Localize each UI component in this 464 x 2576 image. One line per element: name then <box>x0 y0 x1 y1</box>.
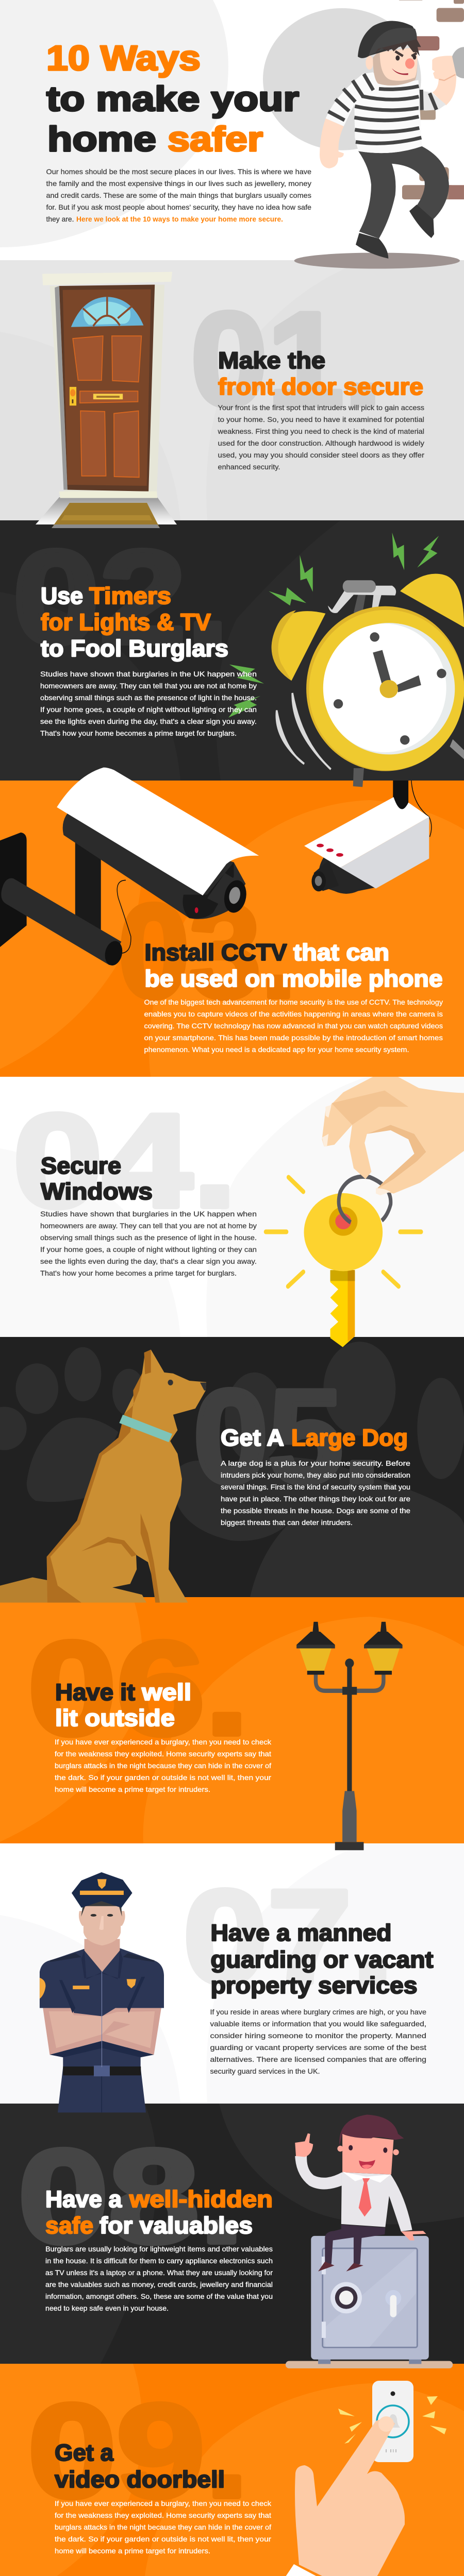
body text <box>217 403 424 471</box>
body text: several things. First is the kind of security system that you <box>221 1483 410 1491</box>
paw print background <box>0 1342 464 1597</box>
heading: for Lights & TV <box>41 609 211 635</box>
body text <box>45 2245 273 2312</box>
panel: 02 use timers <box>0 520 464 787</box>
title: 10 Ways <box>46 39 201 78</box>
body text: alternatives. There are licensed companies that are offering <box>210 2055 426 2063</box>
body text: observing small things such as the presence of light in the house. <box>40 693 257 702</box>
panel: 01 front door <box>0 260 464 528</box>
panel: 04 secure windows <box>0 1077 464 1347</box>
number 08: 08. <box>18 2122 244 2270</box>
illustration: ceiling camera <box>304 781 432 894</box>
heading <box>41 583 228 662</box>
body text: If you have ever experienced a burglary, then you need to check <box>55 2499 272 2507</box>
heading: safe <box>45 2212 93 2239</box>
panel: header <box>0 0 464 269</box>
body text: Studies have shown that burglaries in the UK happen when <box>40 1210 257 1218</box>
illustration: street lamp <box>296 1622 403 1850</box>
heading: Secure <box>41 1153 121 1179</box>
intro text: and credit cards. These are some of the main things that burglars usually comes <box>46 191 311 199</box>
heading: Have a manned <box>210 1920 392 1946</box>
panel: 09 video doorbell <box>0 2364 464 2576</box>
heading: be used on mobile phone <box>144 965 442 992</box>
body text: enhanced security. <box>218 463 280 471</box>
body text: observing small things such as the presence of light in the house. <box>40 1233 257 1242</box>
body text <box>40 670 257 737</box>
body text <box>40 1210 257 1277</box>
body text: If your home goes, a couple of night without lighting or they can <box>40 705 257 714</box>
body text: If your home goes, a couple of night without lighting or they can <box>40 1245 257 1253</box>
body text: need to keep safe even in your house. <box>45 2304 169 2312</box>
heading: Get A <box>221 1425 284 1451</box>
panel: 07 manned guarding <box>0 1843 464 2112</box>
body text: intruders pick your home, they also put into consideration <box>221 1471 410 1479</box>
body text <box>55 1738 272 1793</box>
body text: on your smartphone. This has been made possible by the introduction of smart homes <box>144 1033 443 1042</box>
heading: Use <box>41 583 83 609</box>
body text: Your front is the first spot that intruders will pick to gain access <box>218 403 424 412</box>
heading: Have it <box>55 1679 135 1705</box>
heading: Large Dog <box>291 1425 408 1451</box>
heading: well-hidden <box>129 2186 273 2212</box>
door step shadow and mat <box>36 497 177 528</box>
body text: That's how your home becomes a prime target for burglars. <box>40 1269 237 1277</box>
heading <box>210 1920 434 1998</box>
heading <box>45 2186 273 2239</box>
heading: video doorbell <box>55 2466 225 2493</box>
body text: guarding or vacant property services are some of the best <box>210 2043 426 2052</box>
heading: Timers <box>89 583 171 609</box>
body text: enables you to capture videos of the activities happening in areas where the camera is <box>144 1010 443 1018</box>
heading <box>41 1153 153 1205</box>
body text: to your home. So, you need to have it examined for potential <box>218 415 424 423</box>
title: home <box>47 120 156 159</box>
body text: the possible threats in the house. Dogs are some of the <box>221 1506 410 1515</box>
body text: as TV unless it's a laptop or a phone. What they are usually looking for <box>45 2268 273 2277</box>
body text: Burglars are usually looking for lightweight items and other valuables <box>45 2245 273 2253</box>
intro text: for. But if you ask most people about homes' security, they have no idea how safe <box>46 203 311 211</box>
number 02: 02. <box>13 522 229 671</box>
body text: information, amongst others. So, these are some of the value that you <box>45 2292 273 2300</box>
panel: 05 large dog <box>0 1337 464 1603</box>
body text: see the lights even during the day, that's a clear sign you away. <box>40 717 257 725</box>
body text: burglars attacks in the night because they can hide in the cover of <box>55 1761 271 1770</box>
body text: One of the biggest tech advancement for home security is the use of CCTV. The technology <box>144 998 443 1006</box>
burglar background and bricks <box>263 0 464 199</box>
body text: weakness. First thing you need to check is the kind of material <box>217 427 424 435</box>
body text: valuable items or information that you would like safeguarded, <box>210 2020 426 2028</box>
number 06: 06. <box>28 1614 249 1762</box>
heading: lit outside <box>55 1705 175 1731</box>
body text: Studies have shown that burglaries in the UK happen when <box>40 670 257 678</box>
lightning bolts behind text <box>228 665 264 718</box>
body text <box>221 1459 410 1527</box>
intro text: they are. <box>46 215 74 223</box>
title <box>46 39 299 159</box>
number 03: 03. <box>118 876 296 1025</box>
body text: used for the door construction. Although hardwood is widely <box>218 439 424 447</box>
panel: 08 well-hidden safe <box>0 2104 464 2368</box>
number 04: 04. <box>13 1086 237 1235</box>
body text <box>144 998 443 1054</box>
number 09: 09. <box>28 2376 249 2525</box>
body text: are the valuables such as money, credit cards, jewellery and financial <box>45 2280 273 2289</box>
illustration: dog <box>0 1350 206 1603</box>
body text: the dark. So if your garden or outside is not well lit, then your <box>55 2535 271 2543</box>
intro text: Our homes should be the most secure places in our lives. This is where we have <box>46 167 311 176</box>
heading: for valuables <box>100 2212 253 2239</box>
body text <box>210 2008 426 2075</box>
heading: to Fool Burglars <box>41 635 228 662</box>
body text: burglars attacks in the night because they can hide in the cover of <box>55 2523 271 2531</box>
body text: see the lights even during the day, that's a clear sign you away. <box>40 1257 257 1265</box>
title: to make your <box>46 79 299 118</box>
heading: property services <box>210 1972 418 1998</box>
intro text: the family and the most expensive things in our lives such as jewellery, money <box>46 179 311 188</box>
body text: If you reside in areas where burglary crimes are high, or you have <box>210 2008 426 2016</box>
heading <box>55 2439 225 2493</box>
body text: That's how your home becomes a prime target for burglars. <box>40 729 237 737</box>
intro text <box>46 167 311 223</box>
heading: Windows <box>41 1178 153 1205</box>
body text: security guard services in the UK. <box>210 2067 320 2075</box>
body text: A large dog is a plus for your home security. Before <box>221 1459 410 1467</box>
body text: If you have ever experienced a burglary, then you need to check <box>55 1738 272 1746</box>
illustration: alarm clock <box>269 533 464 787</box>
illustration: wall mounted CCTV camera <box>0 768 259 969</box>
heading: guarding or vacant <box>210 1946 434 1973</box>
heading: Install CCTV <box>144 939 287 965</box>
body text: covering. The CCTV technology has now advanced in that you can watch captured videos <box>144 1022 443 1030</box>
body text <box>55 2499 272 2555</box>
body text: for the weakness they exploited. Home security experts say that <box>55 1750 271 1758</box>
heading: Make the <box>218 347 325 374</box>
body text: home will become a prime target for intruders. <box>55 2547 210 2555</box>
body text: homeowners are away. They can tell that you are not at home by <box>40 1222 257 1230</box>
number 07: 07. <box>183 1862 394 2011</box>
illustration: burglar <box>294 21 464 269</box>
body text: in the house. It is difficult for them to carry appliance electronics such <box>45 2257 273 2265</box>
heading <box>221 1425 408 1451</box>
number 01: 01. <box>191 284 382 433</box>
body text: for the weakness they exploited. Home security experts say that <box>55 2511 271 2519</box>
illustration: hand holding key <box>266 1077 464 1347</box>
body text: used, you may you should consider steel doors as they offer <box>218 451 424 459</box>
heading: that can <box>293 939 389 965</box>
body text: home will become a prime target for intruders. <box>55 1785 210 1793</box>
body text: have put in place. The other things they look out for are <box>221 1495 410 1503</box>
body text: consider hiring someone to monitor the property. Manned <box>210 2031 426 2040</box>
icon: video doorbell and finger <box>259 2381 446 2576</box>
heading <box>55 1679 191 1731</box>
panel: 03 install CCTV <box>0 781 464 1077</box>
illustration: front door <box>36 272 177 528</box>
title: safer <box>168 120 263 159</box>
heading: front door secure <box>218 374 423 400</box>
panel: 06 well lit outside <box>0 1597 464 1850</box>
heading: Get a <box>55 2439 114 2466</box>
intro text: Here we look at the 10 ways to make your home more secure. <box>76 215 283 223</box>
body text: biggest threats that can deter intruders. <box>221 1518 353 1527</box>
heading <box>144 939 442 992</box>
illustration: man sitting on safe <box>286 2115 453 2368</box>
heading: well <box>141 1679 191 1705</box>
number 05: 05. <box>193 1362 380 1511</box>
body text: homeowners are away. They can tell that you are not at home by <box>40 682 257 690</box>
illustration: security guard <box>40 1872 164 2112</box>
heading <box>218 347 423 400</box>
body text: phenomenon. What you need is a dedicated app for your home security system. <box>144 1045 409 1054</box>
body text: the dark. So if your garden or outside is not well lit, then your <box>55 1773 271 1782</box>
heading: Have a <box>45 2186 122 2212</box>
